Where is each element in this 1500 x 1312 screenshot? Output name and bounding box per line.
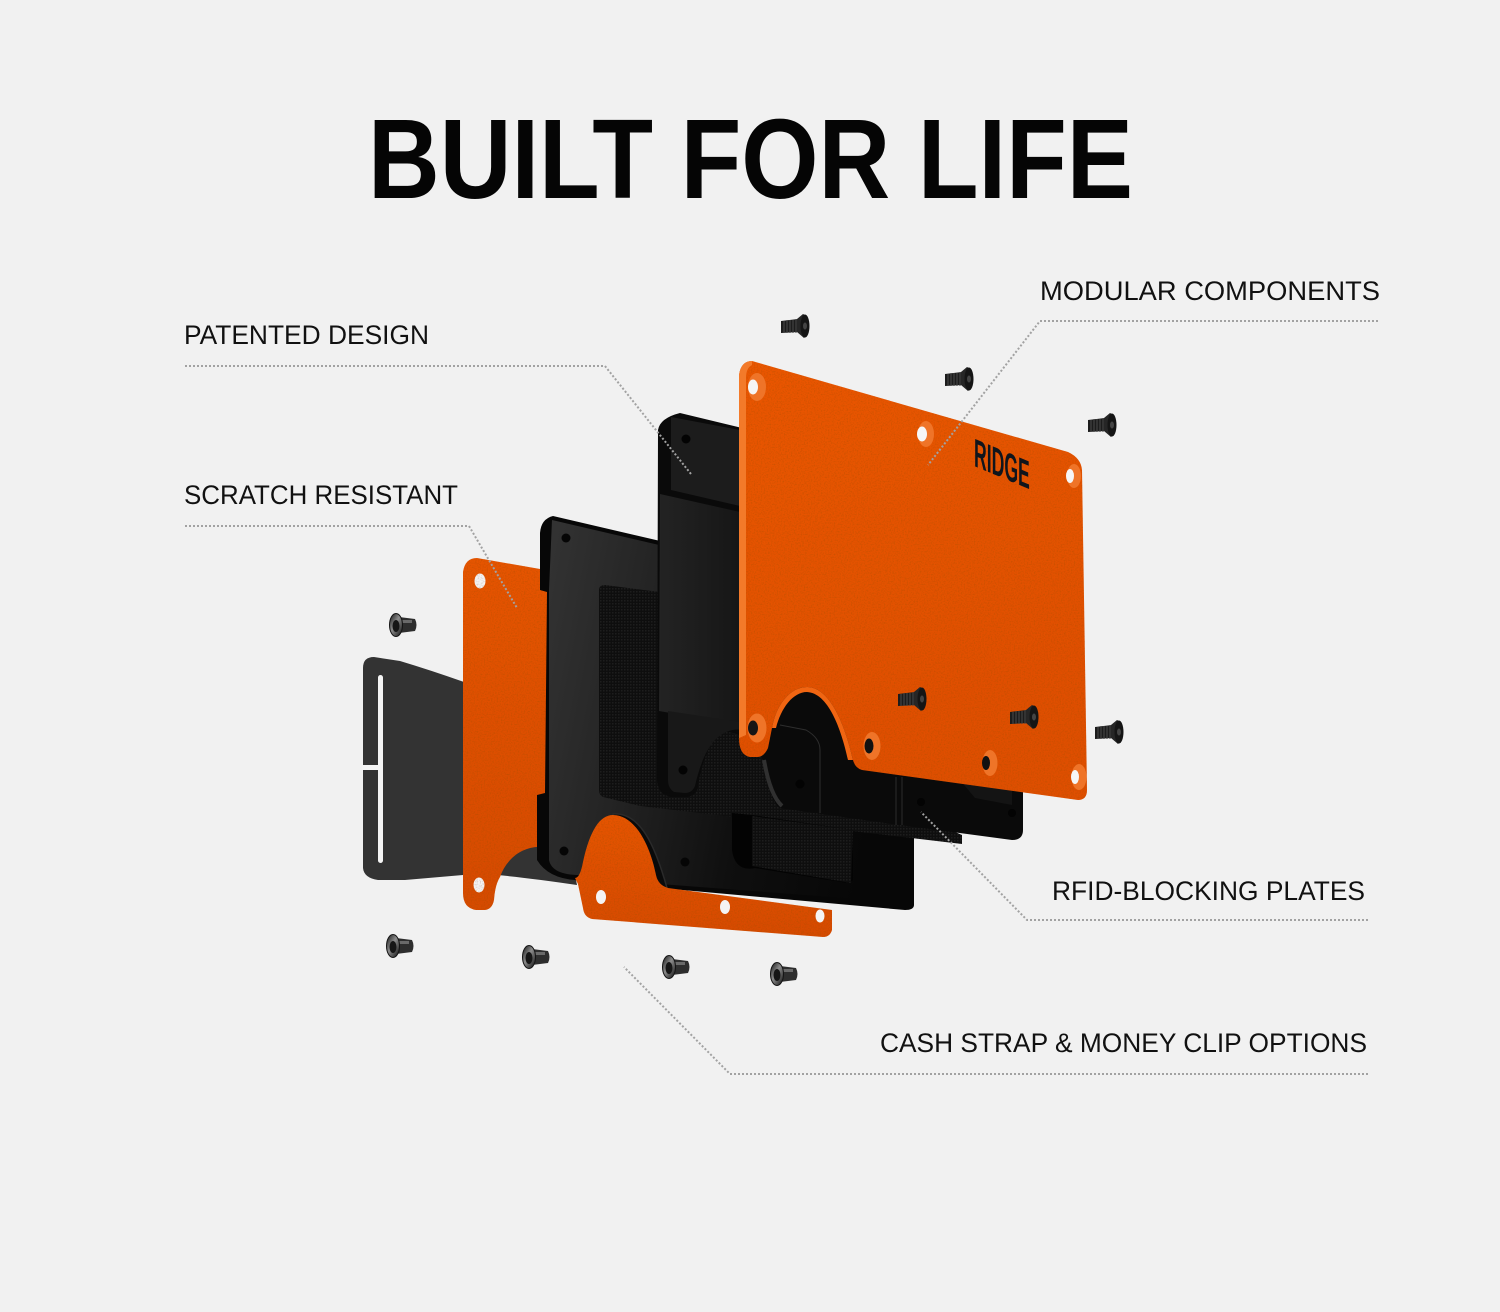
inner black plate [657, 413, 1023, 840]
frame screw holes [560, 534, 690, 866]
label: modular components: MODULAR COMPONENTS [1040, 276, 1380, 306]
lower orange plate [575, 814, 832, 937]
inner plate screw holes [678, 434, 1016, 817]
elastic card band [599, 585, 962, 883]
middle black frame plate [537, 516, 914, 910]
RIDGE logo: RIDGE [974, 430, 1030, 499]
title: BUILT FOR LIFE [368, 96, 1133, 222]
back orange plate [463, 558, 547, 910]
label: rfid-blocking plates [921, 812, 1368, 920]
label: cash strap and money clip options: CASH STRAP & MONEY CLIP OPTIONS [880, 1028, 1367, 1058]
label: scratch resistant [184, 480, 517, 608]
countersunk holes [748, 373, 1086, 790]
label: patented design [184, 320, 691, 474]
label: scratch resistant: SCRATCH RESISTANT [184, 480, 458, 510]
label: patented design: PATENTED DESIGN [184, 320, 429, 350]
label: rfid-blocking plates: RFID-BLOCKING PLATES [1052, 876, 1365, 906]
black screws [781, 314, 1124, 744]
label: modular components [928, 276, 1380, 465]
exploded wallet illustration [362, 314, 1124, 986]
label: cash strap and money clip options [624, 967, 1368, 1074]
money clip [362, 657, 577, 885]
silver screws [386, 614, 798, 986]
main orange front plate [739, 361, 1087, 800]
